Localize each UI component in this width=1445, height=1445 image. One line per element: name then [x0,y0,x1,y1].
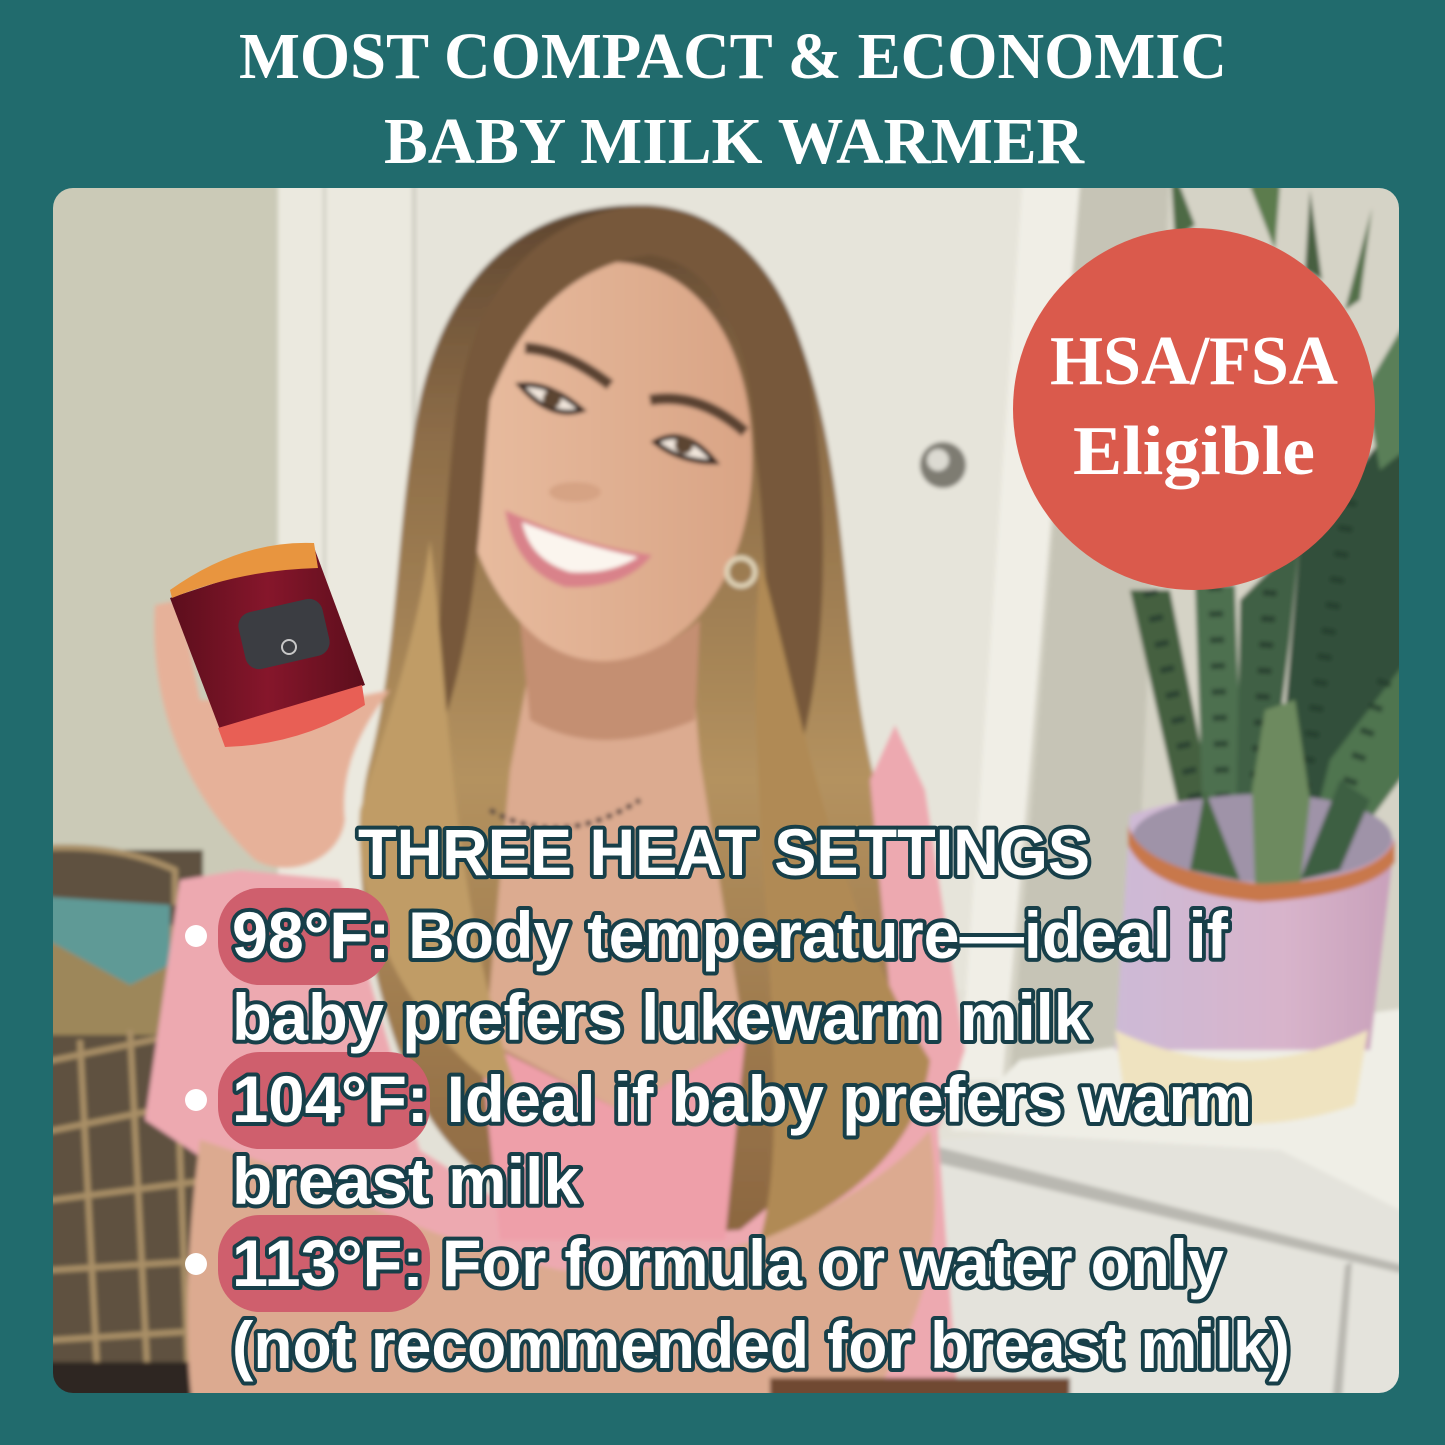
highlight: 98°F [218,888,390,985]
bullet list: heat settings [185,898,1290,1382]
highlight: 104°F [218,1052,430,1149]
basket [53,842,206,1393]
bullet list: heat settings: 98°F: Body temperature—ideal if [232,898,1229,972]
title: MOST COMPACT & ECONOMIC [239,20,1227,93]
necklace [490,800,640,828]
cabinet doors [278,160,1430,1110]
bullet list: heat settings: (not recommended for breast milk) [232,1308,1290,1382]
chest skin [487,686,744,1109]
bullet list: heat settings: baby prefers lukewarm milk [232,980,1090,1054]
pink shirt [145,725,965,1425]
badge: HSA/FSA Eligible: HSA/FSA [1050,323,1338,400]
wall left [53,188,279,877]
plant [1128,188,1399,818]
badge: HSA/FSA Eligible [1013,228,1375,590]
hand [154,600,390,868]
shelf and lower cabinet [938,1008,1399,1393]
bullet list: heat settings: 104°F: Ideal if baby prefers warm [232,1062,1252,1136]
plant pot [1115,700,1395,1124]
arm crossed [184,1132,936,1393]
icon: door knob [920,442,966,488]
bullet list: heat settings: breast milk [232,1144,580,1218]
heading: three heat settings: THREE HEAT SETTINGS [358,815,1090,889]
earring [727,558,755,586]
hair back [360,205,935,1250]
bullet list: heat settings: 113°F: For formula or water only [232,1226,1224,1300]
neck shadow [520,620,700,740]
title [239,20,1227,178]
smile [505,510,652,587]
eyes and brows [520,348,745,502]
leaf stripes [1143,500,1392,800]
device: milk warmer [170,543,365,747]
hair strands front [430,205,823,780]
highlight: 113°F [218,1215,430,1312]
badge: HSA/FSA Eligible: Eligible [1073,413,1315,490]
face [462,262,752,661]
title: BABY MILK WARMER [384,105,1085,178]
